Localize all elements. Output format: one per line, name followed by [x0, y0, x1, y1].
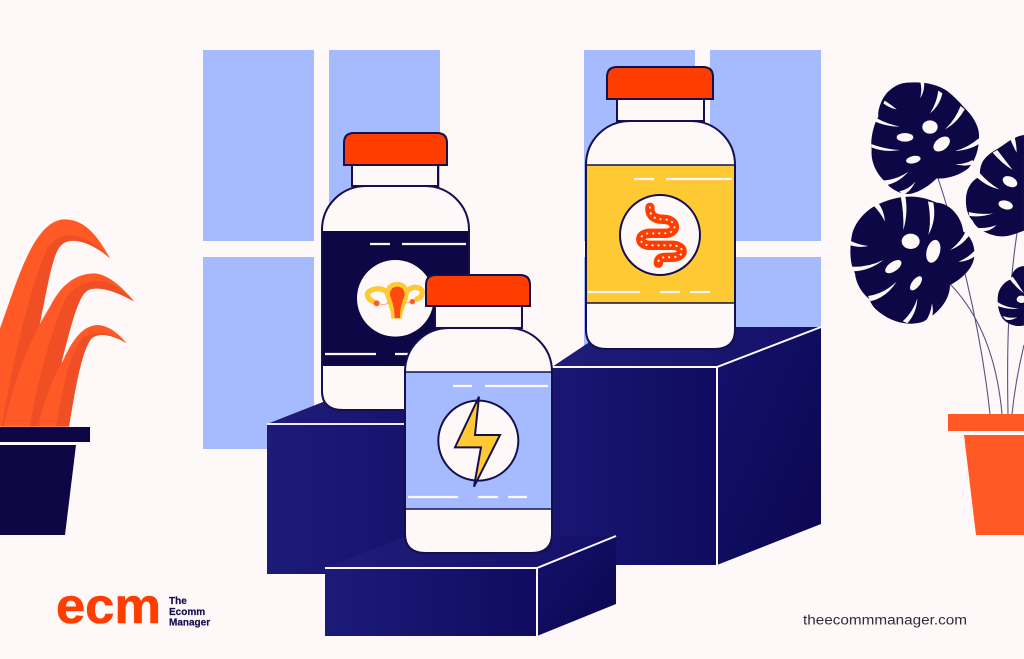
icon: lightning bolt [438, 397, 518, 487]
cap [607, 67, 713, 99]
podium: left box [267, 402, 557, 574]
website url: theecommmanager.com [803, 612, 967, 628]
leaf: large [849, 196, 976, 324]
label [405, 372, 552, 509]
plant: left orange leaves [0, 219, 134, 427]
neck [435, 306, 522, 328]
label [322, 231, 469, 366]
logo name [169, 596, 210, 628]
outline [322, 186, 469, 410]
body [405, 328, 552, 553]
logo: ecm [56, 578, 210, 634]
logo name: The [169, 596, 187, 607]
logo name: Ecomm [169, 607, 205, 618]
plant pot: left navy [0, 427, 90, 535]
plant stems: right [938, 178, 1024, 414]
podium: small front box [325, 536, 616, 636]
leaf: right clipped [966, 135, 1024, 236]
leaf: small right [997, 266, 1024, 326]
icon: intestine [620, 195, 700, 275]
label lines [408, 386, 548, 497]
monstera leaves: right plant [849, 81, 1024, 324]
label lines [325, 244, 466, 354]
icon: uterus [357, 260, 434, 337]
bottle: blue energy [405, 275, 552, 553]
plant pot: right orange [948, 414, 1024, 535]
bottle: navy reproductive health [322, 133, 469, 410]
logo name: Manager [169, 618, 210, 628]
podium: large right box [500, 327, 821, 565]
label lines [588, 179, 732, 292]
logo wordmark: ecm [56, 578, 161, 634]
body [322, 186, 469, 410]
outline [405, 328, 552, 553]
neck [352, 165, 438, 186]
neck [617, 99, 704, 121]
window: right [584, 50, 821, 449]
label [586, 165, 735, 303]
leaf: top [871, 81, 980, 195]
body [586, 121, 735, 349]
outline [586, 121, 735, 349]
window: left [203, 50, 440, 449]
cap [344, 133, 447, 165]
cap [426, 275, 530, 306]
bottle: yellow gut health [586, 67, 735, 349]
